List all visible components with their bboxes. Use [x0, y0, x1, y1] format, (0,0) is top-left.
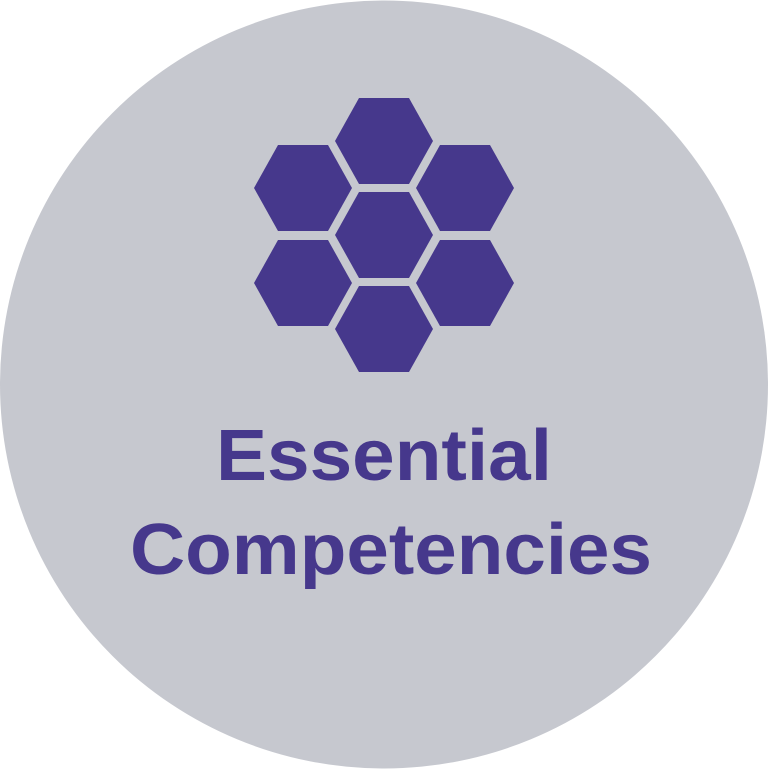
- title: Competencies: [130, 510, 652, 590]
- icon: hexagon cluster: [254, 98, 514, 372]
- title: Essential: [216, 416, 552, 496]
- title: [130, 416, 652, 590]
